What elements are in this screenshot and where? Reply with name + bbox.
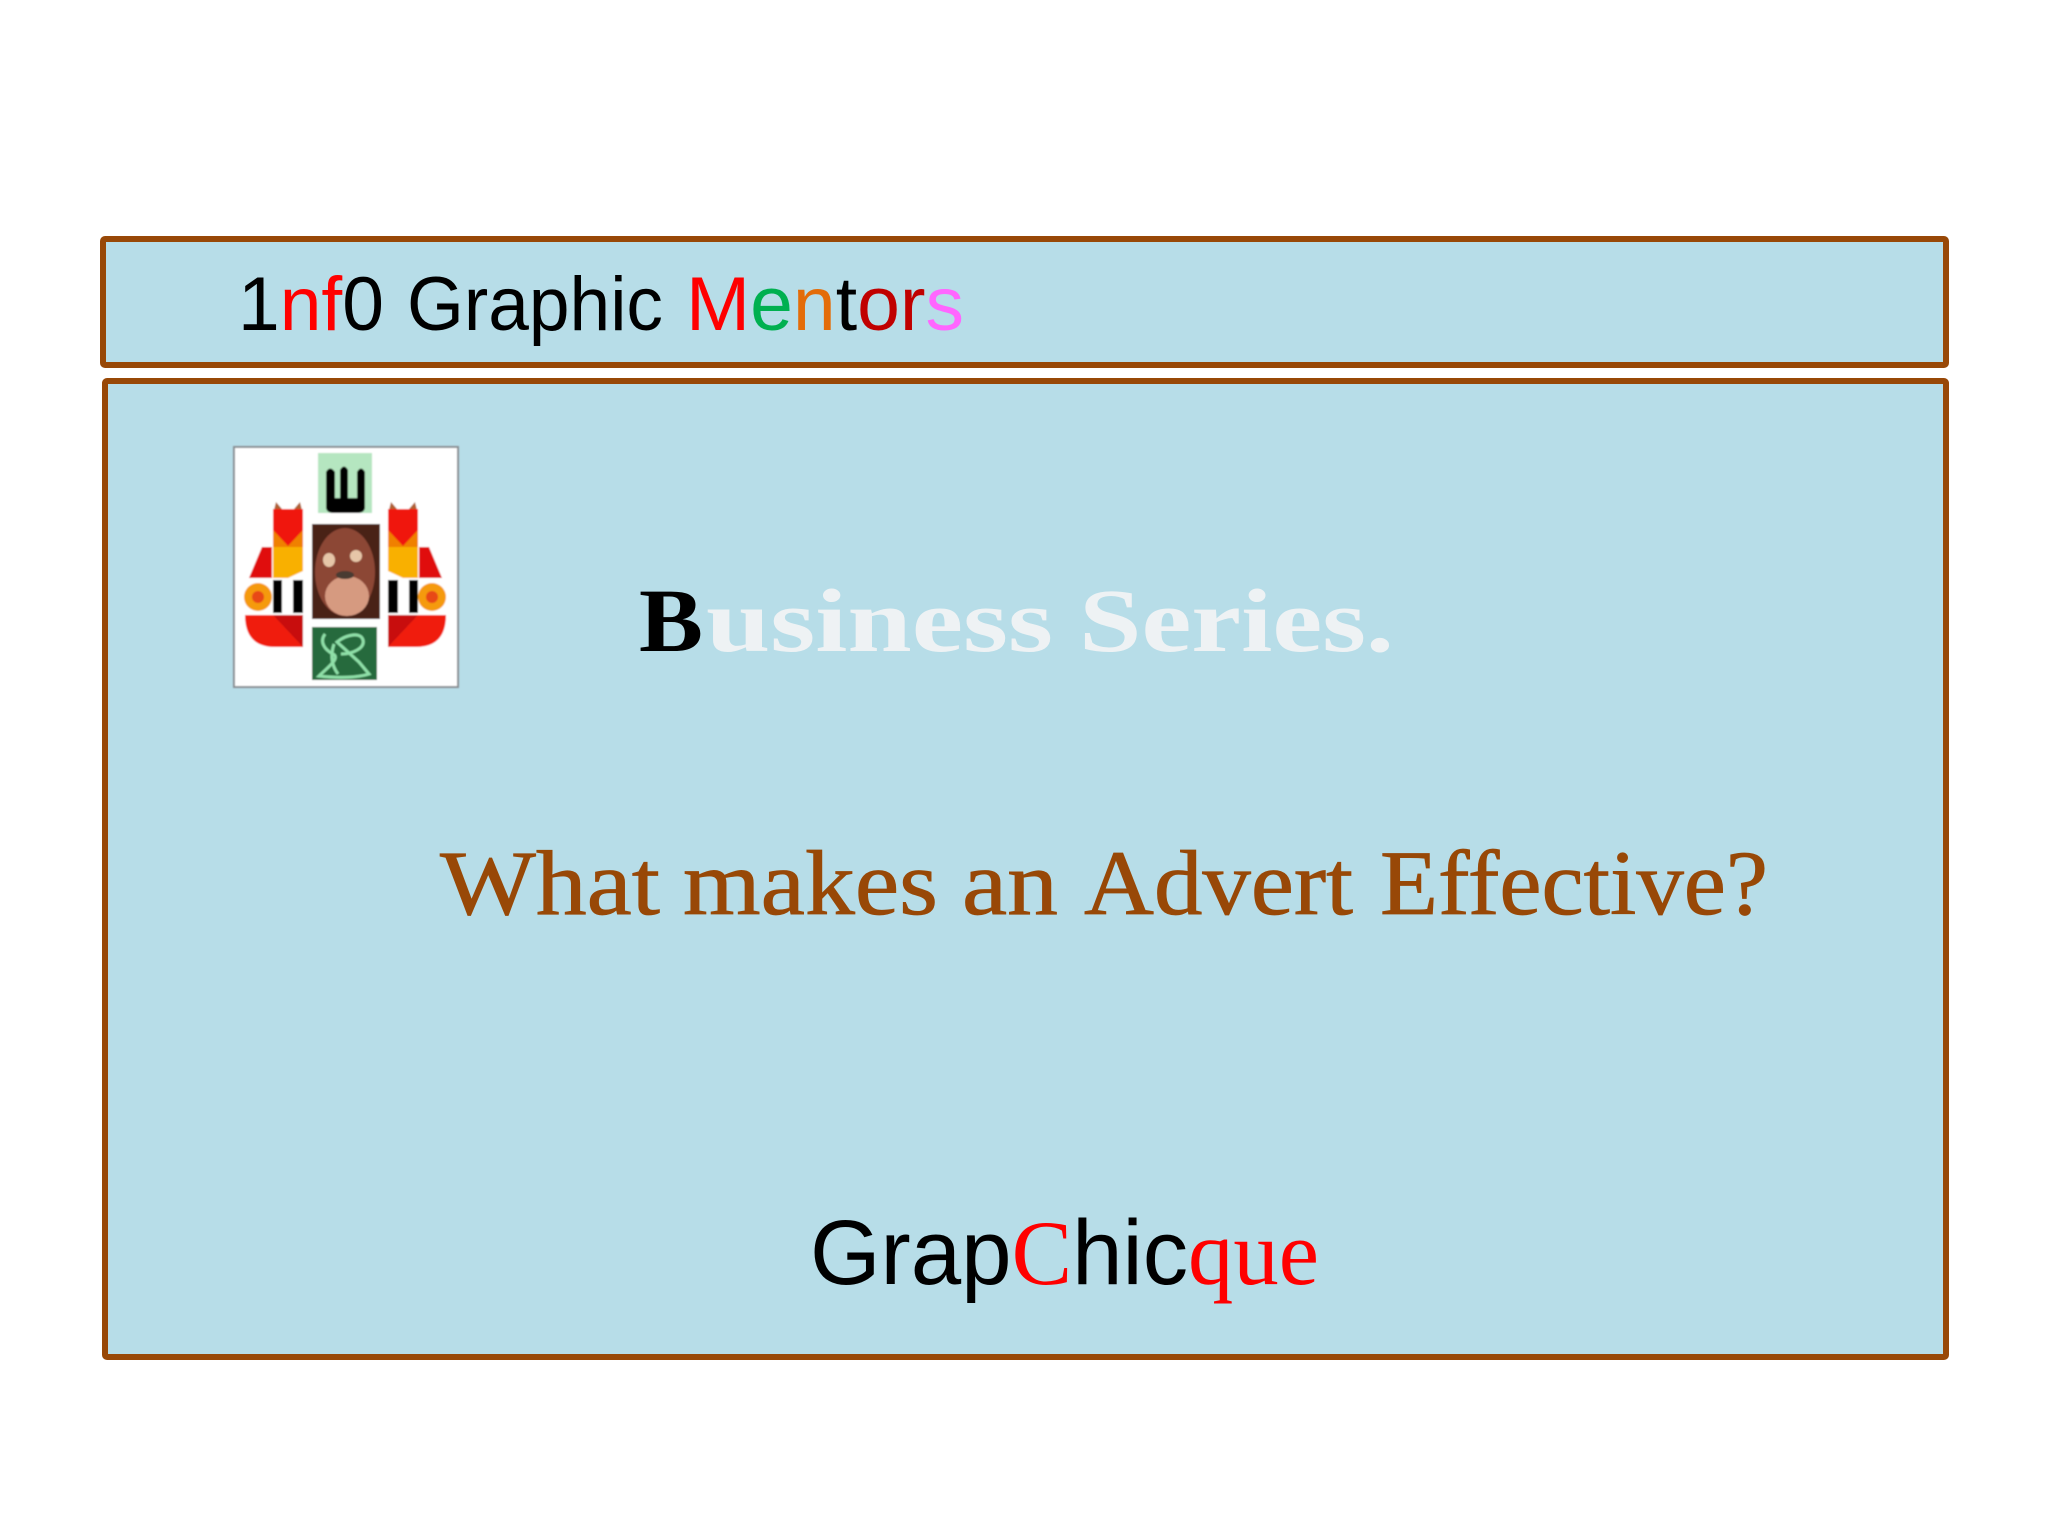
heading: What makes an Advert Effective?: What [440,832,660,934]
heading: Business Series.: Series. [1079,572,1394,671]
heading: What makes an Advert Effective?: makes [683,832,938,934]
heading: 1nf0 Graphic Mentors: Mentors [686,262,964,347]
icon: left fox [244,502,303,647]
heading: 1nf0 Graphic Mentors: Graphic [407,262,663,347]
heading: 1nf0 Graphic Mentors: 1nf0 [238,262,384,347]
heading: What makes an Advert Effective? [440,832,1768,934]
heading: What makes an Advert Effective?: Effective? [1380,832,1768,934]
panel: main title panel [105,381,1946,1357]
heading: Business Series.: usiness [706,572,1053,671]
panel: header bar [103,239,1946,365]
heading: What makes an Advert Effective?: Advert [1084,832,1353,934]
icon: orangutan face [312,524,380,619]
heading: 1nf0 Graphic Mentors [238,262,964,347]
heading: What makes an Advert Effective?: an [962,832,1058,934]
text: GrapChicque brand name: GrapChicque [810,1202,1319,1304]
heading: Business Series. [639,572,1394,671]
icon: top green tile with black crown [318,453,372,513]
heading: Business Series.: B [639,572,703,671]
logo: orangutan and foxes emblem [234,447,458,687]
icon: right fox [388,502,446,647]
icon: bottom green monogram tile [312,627,377,680]
